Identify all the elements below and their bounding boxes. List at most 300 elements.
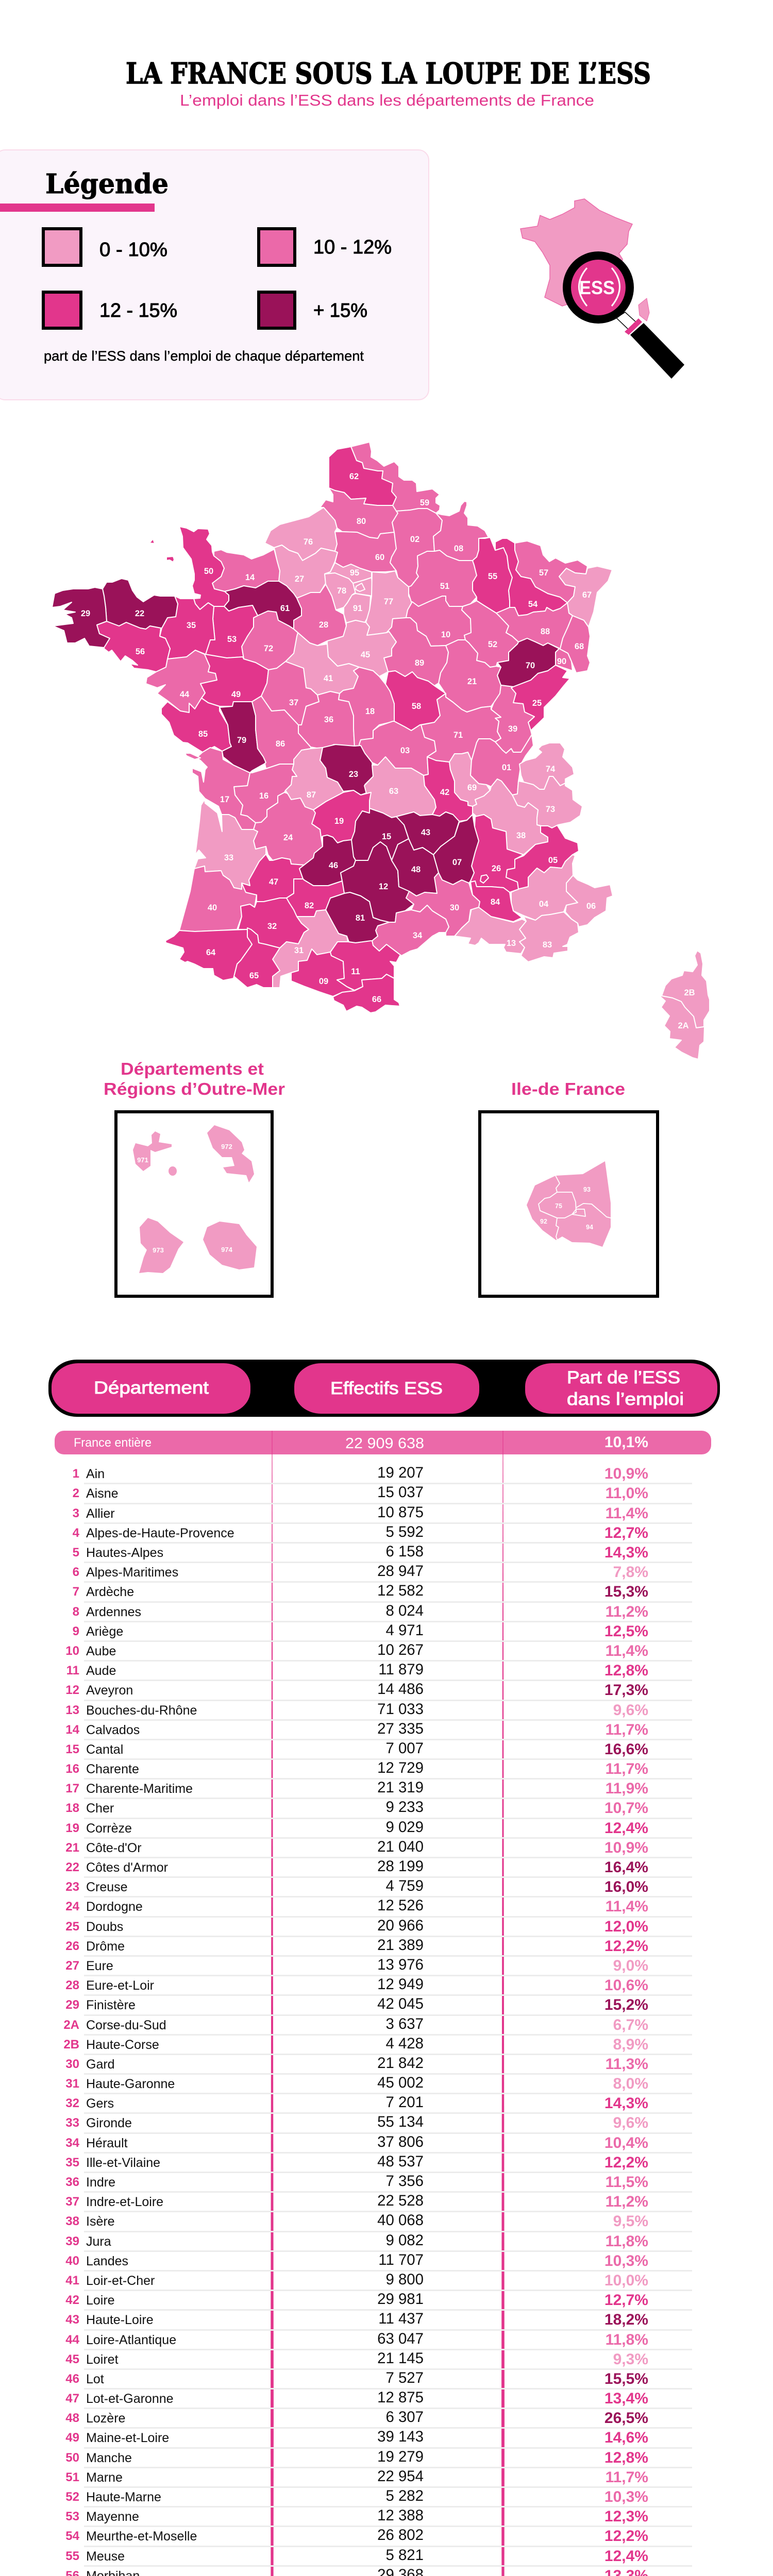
department 50 [179,527,229,609]
department 67 [559,566,612,627]
row 28: Eure-et-Loir [86,1978,154,1993]
department 37 [261,662,319,725]
department 91: 91 [353,604,362,613]
row 47: 12 875 [377,2389,424,2406]
panel: overseas map [116,1112,272,1296]
row 14: 14 [65,1723,79,1737]
department 31 [273,910,348,988]
department 18: 18 [365,707,375,716]
row 17: 21 319 [377,1779,424,1796]
row 18: 10,7% [604,1800,648,1817]
row 29: 15,2% [604,1996,648,2013]
department 14 [212,549,280,591]
department 52: 52 [488,640,497,649]
panel: Ile-de-France map [480,1112,658,1296]
row 21: 10,9% [604,1839,648,1856]
department 10: 10 [441,630,450,639]
row 18: 18 [65,1801,79,1815]
row 28: 12 949 [377,1976,424,1993]
Guadeloupe [133,1131,177,1176]
row 48: 6 307 [385,2409,424,2426]
department 16: 16 [259,791,268,801]
heading: overseas departments: Régions d’Outre-Mer [104,1079,285,1098]
department 10 [406,596,471,646]
department 19 [312,790,371,843]
department 48: 48 [411,865,421,874]
row 52: 5 282 [385,2487,424,2504]
row 42: Loire [86,2293,115,2308]
row 26: Drôme [86,1939,125,1954]
row 45: 21 145 [377,2350,424,2367]
row 44: 63 047 [377,2330,424,2347]
swatch: above 15 percent [259,292,367,328]
row 21: 21 040 [377,1838,424,1855]
subtitle: L’emploi dans l’ESS dans les départements de France [180,91,594,109]
department 03: 03 [400,746,410,755]
department 02: 02 [410,535,419,544]
heading: overseas departments [104,1059,285,1098]
panel: Ile-de-France map: 93 [583,1186,591,1193]
department 27: 27 [295,574,304,584]
row 7: 15,3% [604,1583,648,1600]
row 9: Ariège [86,1624,123,1639]
row 46: 15,5% [604,2370,648,2387]
department 62: 62 [349,472,359,481]
row 15: 15 [65,1742,79,1756]
row 44: 11,8% [606,2331,648,2348]
swatch: 0 to 10 percent [43,229,167,265]
department 58 [385,671,446,731]
department 09 [291,949,355,996]
row 3 [0,1504,773,1523]
row 6: Alpes-Maritimes [86,1565,178,1580]
department 59 [351,442,440,513]
row 18 [0,1799,773,1819]
department 45: 45 [361,650,370,659]
row 41 [0,2271,773,2291]
department 50: 50 [204,567,213,576]
row 37 [0,2192,773,2212]
row 32: 7 201 [385,2094,424,2111]
department 43 [396,812,459,855]
department 84 [470,881,522,922]
department 07 [433,815,479,885]
department 03 [359,721,436,775]
department 29 [52,587,110,648]
row 2: 11,0% [606,1485,648,1502]
row 12: 17,3% [604,1682,648,1699]
department 24: 24 [283,833,293,842]
row 10: Aube [86,1644,116,1658]
department 05 [506,825,579,889]
row 1: 1 [73,1467,79,1481]
header: Part de l'ESS dans l'emploi: Part de l’ESS [567,1368,680,1387]
row 16 [0,1759,773,1779]
row 47 [0,2389,773,2409]
department 52 [462,601,518,667]
row 3: 11,4% [606,1505,648,1522]
department 37: 37 [289,698,298,707]
department 51: 51 [440,582,449,591]
panel: Ile-de-France map: 75 [555,1202,562,1210]
row 39: 39 [65,2234,79,2248]
row 16: 16 [65,1762,79,1776]
department 83: 83 [543,940,552,950]
row 7 [0,1582,773,1602]
row 25: 25 [65,1920,79,1934]
department 41: 41 [324,674,333,683]
row 50 [0,2448,773,2468]
row 36 [0,2173,773,2192]
row 48 [0,2409,773,2428]
row 5: 6 158 [385,1543,424,1560]
row 12: 14 486 [377,1681,424,1698]
department 66 [333,974,400,1013]
row 34: 34 [65,2136,79,2150]
row 4: Alpes-de-Haute-Provence [86,1526,234,1540]
department 76 [265,507,337,561]
department 95: 95 [350,568,359,578]
row 41: Loir-et-Cher [86,2274,155,2288]
row 7: Ardèche [86,1585,134,1599]
row 36: 36 [65,2175,79,2189]
row 29: Finistère [86,1998,136,2012]
row 48: 26,5% [604,2410,648,2427]
department 64: 64 [206,948,216,957]
row 18: Cher [86,1801,114,1816]
row 8: 11,2% [606,1603,648,1620]
Guyane [139,1218,183,1273]
row 29: 42 045 [377,1995,424,2012]
row 53: 12,3% [604,2508,648,2525]
department 35: 35 [187,621,196,630]
row 38: 38 [65,2214,79,2228]
department 35 [160,596,215,659]
row 31: 31 [65,2077,79,2091]
row 22: 22 [65,1860,79,1874]
row 4 [0,1523,773,1543]
department 49: 49 [231,690,241,699]
department 2A: 2A [678,1021,689,1030]
row 41: 41 [65,2274,79,2287]
department 33: 33 [224,853,233,862]
row 33 [0,2113,773,2133]
row 6: 6 [73,1565,79,1579]
department 74: 74 [546,765,556,774]
department 49 [200,654,268,706]
department 15: 15 [382,832,391,841]
row 44 [0,2330,773,2350]
row 25: 20 966 [377,1917,424,1934]
row 35: 48 537 [377,2153,424,2170]
France total row: 10,1% [604,1434,648,1451]
row 9: 4 971 [385,1622,424,1639]
row 16: Charente [86,1762,139,1776]
department 88: 88 [541,627,550,636]
row 46: 46 [65,2372,79,2386]
department 62 [329,447,396,505]
department 68: 68 [575,642,584,651]
row 23: Creuse [86,1880,128,1894]
department 83 [519,912,579,962]
row 51: 22 954 [377,2468,424,2485]
row 29: 29 [65,1998,79,2012]
department 22: 22 [135,609,144,618]
department 86: 86 [276,739,285,749]
row 42: 12,7% [604,2292,648,2309]
row 1: 19 207 [377,1464,424,1481]
row 32 [0,2094,773,2113]
row 51: 51 [65,2470,79,2484]
department 21 [439,640,501,712]
row 55: 55 [65,2549,79,2563]
Paris inner ring [353,578,373,596]
department 12 [341,842,414,922]
row 41: 10,0% [604,2272,648,2289]
department 2B [662,951,710,1028]
department 90: 90 [557,657,566,666]
row 54: 12,2% [604,2528,648,2545]
department 13: 13 [507,939,516,948]
row 43: 18,2% [604,2311,648,2328]
row 10: 10 [65,1644,79,1658]
row 53: Mayenne [86,2510,139,2524]
row 45: Loiret [86,2352,119,2367]
department 60 [335,532,396,572]
swatch: 12 to 15 percent: 12 - 15% [99,300,177,321]
row 19: Corrèze [86,1821,132,1836]
row 49: 39 143 [377,2428,424,2445]
department 01: 01 [502,763,511,772]
row 9 [0,1622,773,1641]
row 37: 37 [65,2195,79,2209]
row 30: Gard [86,2057,115,2072]
row 1: 10,9% [604,1465,648,1482]
department 30 [406,873,480,936]
row 18: 9 233 [385,1799,424,1816]
row 32: 32 [65,2096,79,2110]
row 50: 19 279 [377,2448,424,2465]
row 2A: 2A [63,2018,79,2032]
department 65 [234,928,280,988]
department 54 [495,538,567,616]
department 81 [326,892,389,943]
row 26: 26 [65,1939,79,1953]
row 44: Loire-Atlantique [86,2333,176,2347]
row 11: 11 [66,1664,79,1677]
Guadeloupe: 971 [137,1156,148,1164]
heading: Ile-de-France: Ile-de France [511,1079,625,1098]
department 67: 67 [582,590,592,600]
department 47: 47 [269,877,278,887]
row 27: 13 976 [377,1956,424,1973]
row 14: 27 335 [377,1720,424,1737]
row 55: Meuse [86,2549,125,2564]
department 02 [390,509,442,587]
department 06 [565,875,613,927]
row 12: 12 [65,1683,79,1697]
row 22 [0,1858,773,1877]
panel: legend [0,150,429,400]
row 21 [0,1838,773,1858]
row 17 [0,1779,773,1799]
department 08 [433,501,489,561]
legend heading underline [0,204,155,212]
row 5: 5 [73,1546,79,1560]
department 40 [179,866,257,931]
department 79: 79 [237,736,246,745]
row 26: 12,2% [604,1938,648,1955]
row 2: Aisne [86,1486,119,1501]
row 9: 12,5% [604,1623,648,1640]
department 89: 89 [415,658,424,668]
department 28 [294,584,346,646]
department 41 [285,633,359,695]
department 11 [330,941,401,990]
department 76: 76 [304,537,313,547]
department 88 [496,603,573,649]
department 34 [372,905,449,956]
title: LA FRANCE SOUS LA LOUPE DE L’ESS [126,57,651,91]
row 33: Gironde [86,2116,132,2130]
row 34: 10,4% [604,2134,648,2151]
department 72: 72 [264,644,273,653]
row 37: Indre-et-Loire [86,2195,163,2209]
row 46: 7 527 [385,2369,424,2386]
row 39: 11,8% [606,2233,648,2250]
row 27: Eure [86,1959,113,1973]
row 2: 2 [73,1486,79,1500]
row 54: 26 802 [377,2527,424,2544]
row 36: 11,5% [606,2174,648,2191]
department 39: 39 [508,724,517,734]
department 27 [274,545,338,598]
Channel Islands [149,526,174,562]
row 49: Maine-et-Loire [86,2431,169,2445]
department 63 [364,757,436,818]
row 52: 10,3% [604,2488,648,2505]
department 56: 56 [136,647,145,656]
row 50: 12,8% [604,2449,648,2466]
row 2B: 4 428 [385,2035,424,2052]
row 23: 16,0% [604,1878,648,1895]
row 43: Haute-Loire [86,2313,154,2327]
row 11: Aude [86,1664,116,1678]
row 22: Côtes d'Armor [86,1860,168,1875]
row 46: Lot [86,2372,104,2386]
legend caption: part de l’ESS dans l’emploi de chaque département [44,348,364,364]
department 32: 32 [267,922,277,931]
France total row: France entière [74,1436,152,1450]
row 6: 28 947 [377,1563,424,1580]
row 43: 11 437 [378,2310,424,2327]
header: Part de l'ESS dans l'emploi [525,1363,717,1414]
row 9: 9 [73,1624,79,1638]
row 17: 17 [65,1782,79,1795]
department 82: 82 [305,901,314,910]
row 40: 11 707 [378,2251,424,2268]
row 26 [0,1937,773,1956]
row 15: 16,6% [604,1741,648,1758]
department 2B: 2B [684,988,695,997]
row 37: 11,2% [606,2193,648,2210]
row 49 [0,2428,773,2448]
department 45 [327,620,396,676]
department 42 [424,757,473,821]
row 38: 40 068 [377,2212,424,2229]
row 2A: 3 637 [385,2015,424,2032]
department 69: 69 [467,783,477,792]
department 71 [421,693,501,762]
row 10: 10 267 [377,1641,424,1658]
row 24: 24 [65,1900,79,1913]
row 35 [0,2153,773,2173]
row 14 [0,1720,773,1740]
row 12 [0,1681,773,1701]
department 56 [97,621,170,672]
island: Ré [185,753,200,759]
department 33 [194,800,266,889]
department 06: 06 [586,902,596,911]
row 40: Landes [86,2254,128,2268]
row 30 [0,2055,773,2074]
row 52: 52 [65,2490,79,2504]
department 58: 58 [412,702,421,711]
row 35: 12,2% [604,2154,648,2171]
panel: Ile-de-France map: 94 [586,1224,593,1231]
Martinique [207,1125,254,1182]
department 44: 44 [180,690,190,699]
row 31: Haute-Garonne [86,2077,175,2091]
department 74 [519,743,574,789]
row 2B: Haute-Corse [86,2038,159,2052]
row 1: Ain [86,1467,105,1481]
row 13: Bouches-du-Rhône [86,1703,197,1718]
row 51: Marne [86,2470,123,2485]
department 26 [470,815,524,892]
department 85: 85 [198,730,208,739]
row 33: 9,6% [613,2114,648,2131]
row 3: 3 [73,1506,79,1520]
row 4: 12,7% [604,1524,648,1541]
header: Part de l'ESS dans l'emploi: dans l’emploi [567,1389,684,1409]
header: Effectifs ESS [294,1363,479,1414]
department 17: 17 [220,795,229,804]
department 16 [234,764,297,823]
row 23: 4 759 [385,1877,424,1894]
row 30: 21 842 [377,2055,424,2072]
row 33: 55 134 [377,2113,424,2130]
department 22 [103,579,178,629]
row 15: 7 007 [385,1740,424,1757]
department 11: 11 [351,967,360,976]
row 36: 7 356 [385,2173,424,2190]
department 71: 71 [453,731,463,740]
row 34: 37 806 [377,2133,424,2150]
swatch: 0 to 10 percent: 0 - 10% [99,239,167,261]
row 32: Gers [86,2096,114,2111]
department 51 [409,550,477,606]
row 54 [0,2527,773,2547]
department 28: 28 [319,620,328,630]
department 63: 63 [389,787,398,796]
row 24: Dordogne [86,1900,143,1914]
France total row [55,1431,711,1454]
row 46 [0,2369,773,2389]
row 47: Lot-et-Garonne [86,2392,174,2406]
row 54: Meurthe-et-Moselle [86,2529,197,2544]
department 30: 30 [450,903,459,912]
